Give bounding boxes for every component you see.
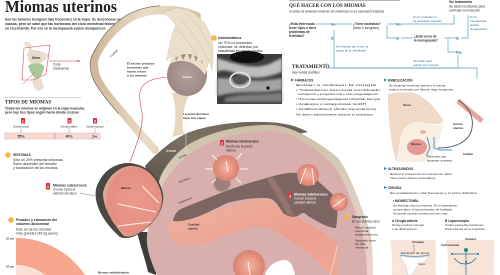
ovary and fimbria	[160, 8, 213, 137]
pale vessel line	[330, 246, 337, 275]
text block: pesadez: Pesadez y cansancio del	[16, 218, 57, 222]
flowchart: quizás	[470, 23, 479, 27]
text: hormone note	[127, 62, 155, 78]
bar: proportion of types: Submucosos	[86, 124, 104, 128]
text block: pesadez	[8, 217, 58, 236]
intro text: causas, pero se sabe que las hormonas del ciclo menstrual favorecen	[5, 22, 121, 26]
flowchart: menopausia	[470, 19, 487, 23]
text: miomas intramurales	[220, 140, 259, 152]
illustration: open surgery: Útero	[418, 261, 426, 266]
text: sangrado: En los submucosos	[352, 220, 380, 224]
text: miomas submucosos: 3	[289, 194, 291, 198]
icon: small uterus with transversal section: Útero	[32, 55, 40, 60]
text: uterine wall note: tiene tres capas	[183, 116, 206, 120]
uterine cavity salmon	[168, 198, 337, 275]
panel: qué hacer con los miomas	[289, 0, 400, 14]
illustration: open surgery	[390, 240, 436, 275]
text: ultrasonidos: Reduce el volumen de los miomas con ultras.	[390, 172, 453, 176]
flowchart: desaparecen	[470, 27, 488, 31]
text: sangrado: Sangrado	[352, 215, 368, 219]
text: cirugía: • MIOMECTOMÍA	[393, 198, 419, 203]
uterine cavity light stripe	[267, 177, 294, 216]
flowchart: fertilidad?	[289, 34, 304, 38]
flowchart: la menopausia?	[414, 38, 438, 42]
intro text: Son los tumores benignos más frecuentes en la mujer. Se desconocen sus	[5, 18, 123, 22]
flowchart: No	[331, 22, 336, 26]
text: miomas subserosos: Miomas subserosos	[53, 184, 87, 188]
text: sangrado: Menor cantidad	[355, 226, 376, 230]
text: embolización: reduce su tamaño por falta de riego sanguíneo.	[389, 88, 454, 92]
text: miomas intramurales: uterina	[226, 148, 236, 152]
mioma on right edge	[330, 193, 348, 211]
text: hormone note: hormonas que	[127, 66, 149, 70]
chart: abdominal volume concentric circles: 10 cm	[6, 264, 14, 268]
flowchart: En la	[470, 15, 477, 19]
illustration: embolization	[388, 92, 482, 162]
flowchart: problemas de	[289, 30, 310, 34]
text: cirugía abierta: A Cirugía abierta	[392, 219, 418, 223]
mioma on cavity wall	[297, 164, 319, 186]
text: ultrasonidos	[384, 167, 453, 180]
text: embolización	[384, 78, 454, 92]
uterus layer labels	[166, 148, 199, 230]
heading: tratamiento: Hay varias posibles	[292, 70, 320, 74]
text: miomas intramurales: Miomas intramurales	[226, 140, 259, 144]
text: embolización: EMBOLIZACIÓN	[388, 78, 413, 82]
text: cirugía abierta: o de difícil acceso.	[392, 227, 418, 231]
panel: tipos de miomas: pero hay tres tipos según hacia dónde crezcan	[5, 110, 79, 114]
text: fármacos: • Análogos o antagonistas GnRH	[296, 102, 366, 106]
illustration: embolization: bloquean la arteria	[427, 158, 452, 162]
icon: small uterus with transversal section: Corte	[53, 62, 61, 66]
text: uterine wall note	[183, 112, 209, 155]
text: ultrasonidos: ULTRASONIDOS	[388, 167, 413, 171]
uterine cavity dark	[173, 173, 337, 228]
fallopian tube	[94, 10, 197, 150]
illustration: embolization: Catéter	[463, 152, 474, 156]
ovary and fimbria: Ovario	[182, 75, 192, 79]
mioma subseroso: large cross-section: Mioma	[121, 186, 131, 190]
text: laparoscopia	[445, 219, 486, 231]
illustration: embolization: Partículas que	[427, 154, 447, 158]
flowchart: (dolor o sangrado)	[353, 26, 379, 30]
illustration: embolization: Útero	[403, 102, 411, 107]
flowchart: Sin tratamiento	[449, 0, 472, 4]
uterus inner pink body	[147, 131, 367, 275]
bar: proportion of types: 1	[22, 119, 24, 123]
text block: pesadez: volumen abdominal	[16, 222, 49, 226]
bar: proportion of types: Subserosos	[13, 124, 29, 128]
text: miomas submucosos: Miomas submucosos	[294, 192, 328, 196]
text: ultrasonidos: Tiene pocos efectos secundarios.	[390, 176, 436, 180]
uterus layer labels: ÚTERO	[166, 148, 177, 153]
text: hormone note: El exceso produce	[127, 62, 155, 66]
text block: síntomas: Éstos dependen del tamaño	[13, 161, 57, 166]
text: sangrado: coágulos/anemia	[355, 232, 378, 236]
flowchart: Sí	[456, 36, 460, 40]
panel: tipos de miomas: TIPOS DE MIOMAS	[5, 100, 51, 106]
flowchart: Sí	[331, 36, 335, 40]
text: miomas subserosos: Crecen hacia el	[53, 188, 75, 192]
text: miomas intramurales: 2	[221, 141, 223, 145]
text: asintomáticos	[211, 35, 263, 53]
flowchart: No	[396, 22, 401, 26]
heading: tratamiento: TRATAMIENTO	[292, 65, 330, 70]
uterus layer labels: uterina	[188, 226, 198, 230]
text block: síntomas: y localización de los miomas.	[13, 166, 58, 170]
text: sangrado: del ciclo	[355, 242, 366, 246]
fallopian tube shadow edge	[90, 6, 160, 114]
text block: pesadez: Éste es de los miomas	[16, 226, 51, 232]
growth arrows	[118, 186, 159, 226]
dark lower wedge behind uterus	[137, 232, 160, 275]
uterus taupe back wall	[145, 122, 308, 184]
uterus outer rim	[147, 125, 373, 275]
text: asintomáticos: casualidad en una ecografía.	[218, 49, 263, 53]
text: cirugía: conservador, si hay pretensión de fertilidad.	[393, 208, 453, 212]
text: embolización: Se bloquean la arteria uterina y el mioma	[389, 84, 446, 88]
illustration: embolization: uterina	[453, 126, 463, 130]
uterus layer labels: Cavidad	[188, 222, 199, 226]
panel: qué hacer con los miomas: Cuando se detectan miomas sin síntomas no es necesario tratarlos	[289, 10, 385, 14]
flowchart: Se tratan para	[413, 59, 432, 63]
mioma at lower wall	[233, 250, 265, 275]
text: cirugía	[384, 185, 478, 216]
flowchart: controlar su evolución	[449, 8, 480, 12]
text: miomas multilobulados: Miomas multilobulados	[98, 270, 130, 274]
text: fármacos: No deben administrarse durante el embarazo.	[296, 112, 374, 116]
flowchart: es necesario tratarlos	[413, 19, 442, 23]
panel: qué hacer con los miomas: QUÉ HACER CON LOS MIOMAS	[289, 3, 366, 9]
arrow: to transversal cut	[49, 60, 80, 62]
bar: proportion of types: 5%	[93, 134, 97, 138]
text: laparoscopia: Cuatro pequeñas incisiones.	[445, 223, 484, 227]
text: hormone note: a los miomas	[127, 74, 147, 78]
text: sangrado: Sangrado fuera	[355, 238, 376, 242]
text block: síntomas: Sólo un 20% presenta síntomas.	[13, 158, 64, 162]
icon: small uterus with transversal section	[22, 42, 80, 91]
text: fármacos: Evitan o reducen la cirugía	[296, 83, 377, 87]
flowchart: ¿Está interesada	[289, 22, 315, 26]
flowchart: ¿Está cerca de	[414, 34, 437, 38]
text: fármacos	[291, 78, 380, 116]
panel: tipos de miomas: Todos los miomas se originan en la capa muscular,	[5, 106, 85, 110]
text: cirugía: CIRUGÍA	[388, 185, 402, 190]
flowchart: tener hijos o tiene	[289, 26, 317, 30]
text: fármacos: estrógenos y progesterona o sólo progestágenos	[298, 92, 379, 96]
illustration: embolization: Mioma	[411, 142, 421, 146]
mioma subseroso: large cross-section	[96, 163, 163, 238]
illustration: open surgery: Extracción de mioma	[401, 251, 429, 255]
chart: abdominal volume concentric circles	[6, 236, 85, 275]
text: hormone note: hacen crecer	[127, 70, 147, 74]
text: asintomáticos: Un 70% no presentan	[218, 41, 252, 45]
illustration: laparoscopy: Instrumental	[441, 243, 459, 247]
uterus layer labels: Miometrio	[178, 176, 191, 184]
icon: small uterus with transversal section: transversal	[53, 66, 69, 70]
bar: proportion of types: 40%	[65, 134, 73, 138]
flowchart: causa de la infertilidad	[336, 48, 366, 52]
text block: síntomas: SÍNTOMAS	[13, 152, 32, 157]
text: miomas submucosos: cavidad uterina	[294, 200, 316, 204]
text: sangrado	[344, 214, 380, 250]
illustration: laparoscopy: Cámara	[465, 237, 476, 241]
text: laparoscopia: B Laparoscopia	[445, 219, 469, 223]
text: miomas submucosos	[288, 192, 328, 204]
bar: proportion of types: Intramurales	[61, 124, 78, 128]
text: miomas subserosos: 1	[47, 185, 49, 189]
text: cirugía abierta	[392, 219, 424, 231]
text: fármacos: • Hormonas antiprogestágenas (Ulipristal, Esmya)	[296, 97, 380, 101]
text: laparoscopia: Para miomas de la superficie.	[445, 227, 486, 231]
tube label: Trompa	[109, 48, 119, 59]
red leader line: hormones	[130, 77, 168, 162]
text: fármacos: • Tratamiento hormonal combinado	[296, 88, 380, 92]
uterus layer labels: Endometrio	[178, 196, 193, 205]
mioma intramural	[205, 153, 248, 192]
bar: proportion of types: 55%	[17, 134, 25, 138]
text: cirugía abierta: Si hay muchos miomas	[392, 223, 424, 227]
bar: proportion of types	[5, 118, 104, 139]
bar: proportion of types: 2	[69, 119, 71, 123]
text block: síntomas	[5, 152, 64, 170]
image: ultrasound	[217, 51, 282, 104]
flowchart: Se hacen revisiones para	[449, 4, 485, 8]
text block: pesadez: más grandes (45 kg aprox)	[16, 232, 58, 236]
intro text: su crecimiento. Por eso en la menopausia suelen desaparecer.	[5, 26, 106, 30]
text: miomas intramurales: Dentro de la pared	[226, 144, 253, 148]
illustration: open surgery: Cirujano	[412, 240, 424, 244]
flowchart: reducir los miomas	[413, 63, 439, 67]
text: sangrado: menstrual	[355, 246, 369, 250]
flowchart: Se extirpan por si son la	[336, 44, 369, 48]
text: miomas submucosos: Crecen hacia la	[294, 196, 316, 200]
text: sangrado: menstrual,	[355, 229, 369, 233]
panel: tipos de miomas	[5, 98, 104, 139]
illustration: embolization: Arteria	[453, 122, 463, 126]
text: fármacos: FÁRMACOS	[295, 78, 313, 82]
flowchart	[289, 0, 488, 68]
bar: proportion of types: 3	[94, 119, 96, 123]
text: asintomáticos: Asintomáticos	[218, 36, 241, 40]
text: miomas subserosos: exterior del útero	[53, 192, 77, 196]
text: cirugía: Es el tratamiento más frecuente y el único definitivo.	[390, 191, 478, 195]
flowchart: Sí	[396, 36, 400, 40]
flowchart: ¿Tiene molestias?	[353, 22, 381, 26]
text: cirugía: Se puede acceder al útero por tres vías:	[393, 212, 448, 216]
text: asintomáticos: síntomas, se detectan por	[218, 45, 259, 49]
chart: abdominal volume concentric circles: 15 cm	[6, 236, 14, 240]
uterus layer labels: Serosa	[178, 152, 188, 160]
flowchart: No	[456, 50, 461, 54]
illustration: laparoscopy	[441, 237, 494, 275]
text: cirugía: Se eliminan sólo los miomas. Es el tratamiento	[393, 204, 457, 208]
heading: tratamiento	[292, 63, 477, 79]
text: fármacos: • Antifibrinolíticos (Ácido tranexámico)	[296, 107, 376, 111]
flowchart: Si no molestan no	[413, 15, 437, 19]
text: uterine wall note: La pared del útero	[183, 112, 209, 116]
intro text	[5, 18, 123, 30]
text: miomas subserosos	[46, 183, 95, 196]
